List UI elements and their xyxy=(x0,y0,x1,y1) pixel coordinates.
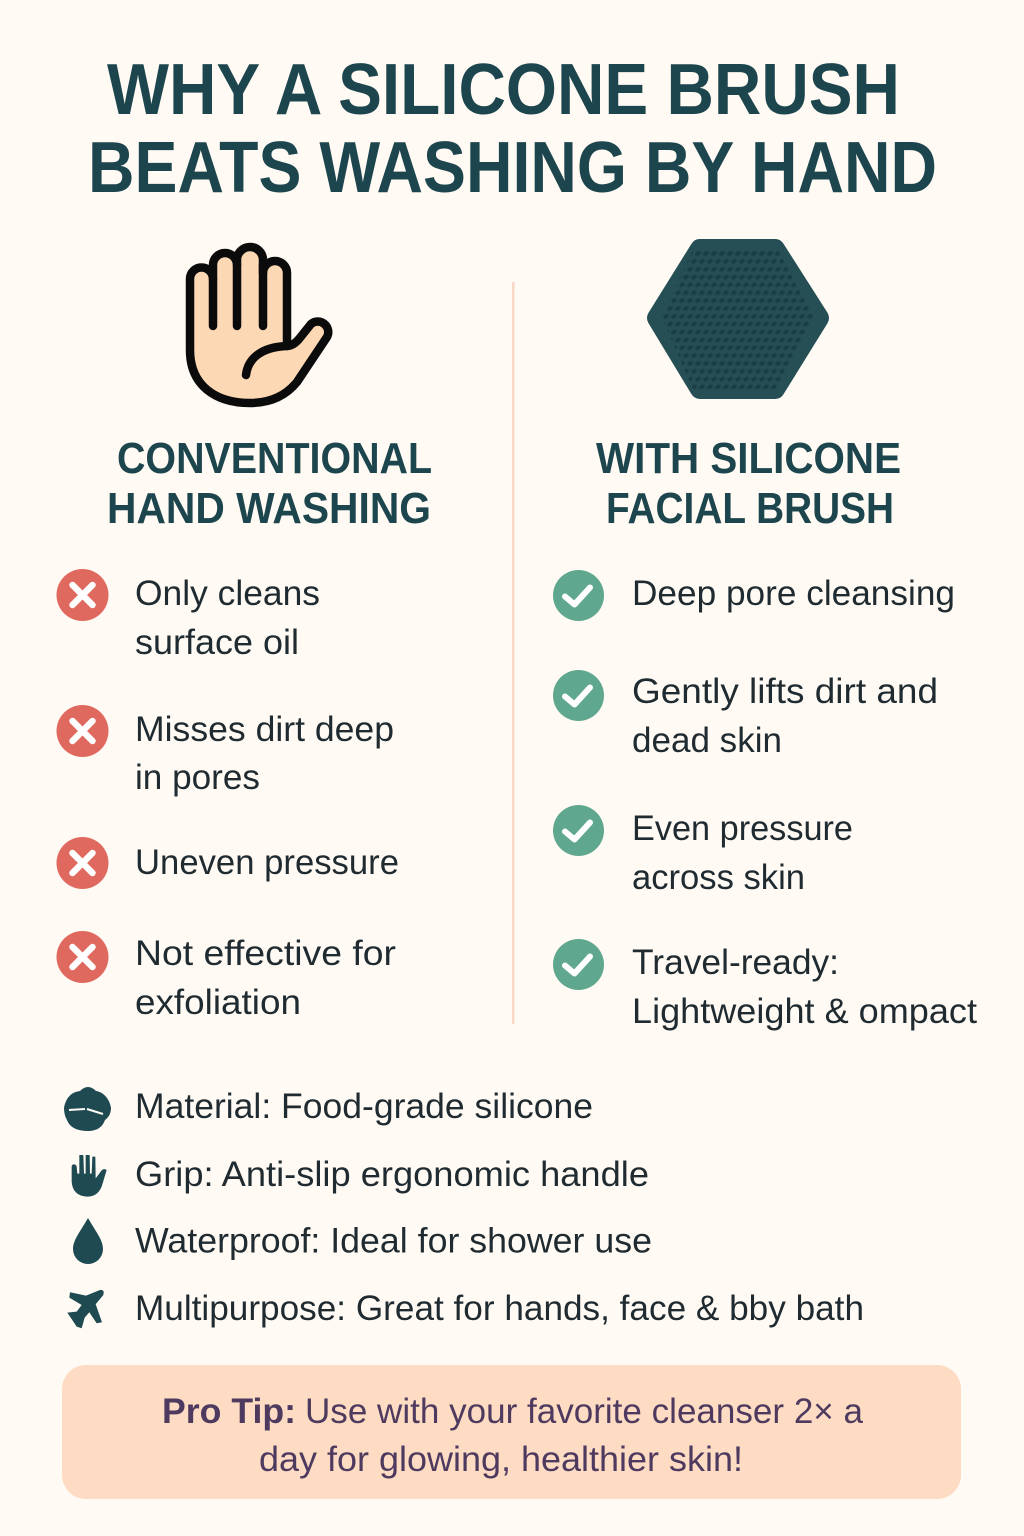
benefit: even pressure: across skin xyxy=(632,858,805,897)
drawback: misses dirt: Misses dirt deep xyxy=(135,710,394,749)
drawback: surface oil: surface oil xyxy=(135,623,299,662)
benefit: lifts dirt: Gently lifts dirt and xyxy=(632,672,938,711)
drawback: exfoliation: Not effective for xyxy=(135,934,396,973)
title xyxy=(88,50,937,208)
benefit: even pressure xyxy=(553,805,853,897)
icon: raised hand xyxy=(190,247,328,403)
drawback: misses dirt xyxy=(56,705,394,797)
panel: hand washing drawbacks xyxy=(56,569,399,1022)
title: BEATS WASHING BY HAND xyxy=(88,128,937,208)
drawback: uneven pressure: Uneven pressure xyxy=(135,843,399,882)
benefit: even pressure: Even pressure xyxy=(632,809,853,848)
benefit: lifts dirt xyxy=(553,670,938,760)
callout: pro tip: Pro Tip: xyxy=(162,1392,296,1431)
benefit: deep pore cleansing xyxy=(553,570,955,621)
heading: with silicone facial brush: FACIAL BRUSH xyxy=(606,484,894,533)
heading: conventional hand washing: CONVENTIONAL xyxy=(117,434,432,483)
benefit: lifts dirt: dead skin xyxy=(632,721,782,760)
drawback: uneven pressure xyxy=(56,837,399,889)
panel: product features xyxy=(64,1087,864,1328)
callout: pro tip: Use with your favorite cleanser 2× a xyxy=(305,1392,864,1431)
drawback: surface oil: Only cleans xyxy=(135,574,320,613)
drawback: exfoliation: exfoliation xyxy=(135,983,301,1022)
benefit: travel-ready: Travel-ready: xyxy=(632,943,839,982)
benefit: travel-ready xyxy=(553,939,977,1031)
callout: pro tip xyxy=(62,1365,961,1499)
feature: multipurpose: Multipurpose: Great for hands, face & bby bath xyxy=(135,1289,864,1328)
heading: conventional hand washing: HAND WASHING xyxy=(107,484,431,533)
feature: material: Material: Food-grade silicone xyxy=(135,1087,593,1126)
panel: silicone brush benefits xyxy=(553,570,977,1031)
icon: silicone brush head xyxy=(657,249,819,389)
divider xyxy=(512,282,514,1024)
feature: grip: Grip: Anti-slip ergonomic handle xyxy=(135,1155,649,1194)
drawback: surface oil xyxy=(56,569,320,662)
heading: with silicone facial brush: WITH SILICONE xyxy=(596,434,901,483)
heading: with silicone facial brush xyxy=(596,434,901,533)
callout: pro tip: day for glowing, healthier skin! xyxy=(259,1440,743,1479)
benefit: travel-ready: Lightweight & ompact xyxy=(632,992,977,1031)
feature: waterproof: Waterproof: Ideal for shower use xyxy=(135,1222,652,1260)
heading: conventional hand washing xyxy=(107,434,432,533)
title: WHY A SILICONE BRUSH xyxy=(107,50,900,130)
drawback: exfoliation xyxy=(56,931,396,1022)
benefit: deep pore cleansing: Deep pore cleansing xyxy=(632,574,955,613)
drawback: misses dirt: in pores xyxy=(135,758,260,797)
